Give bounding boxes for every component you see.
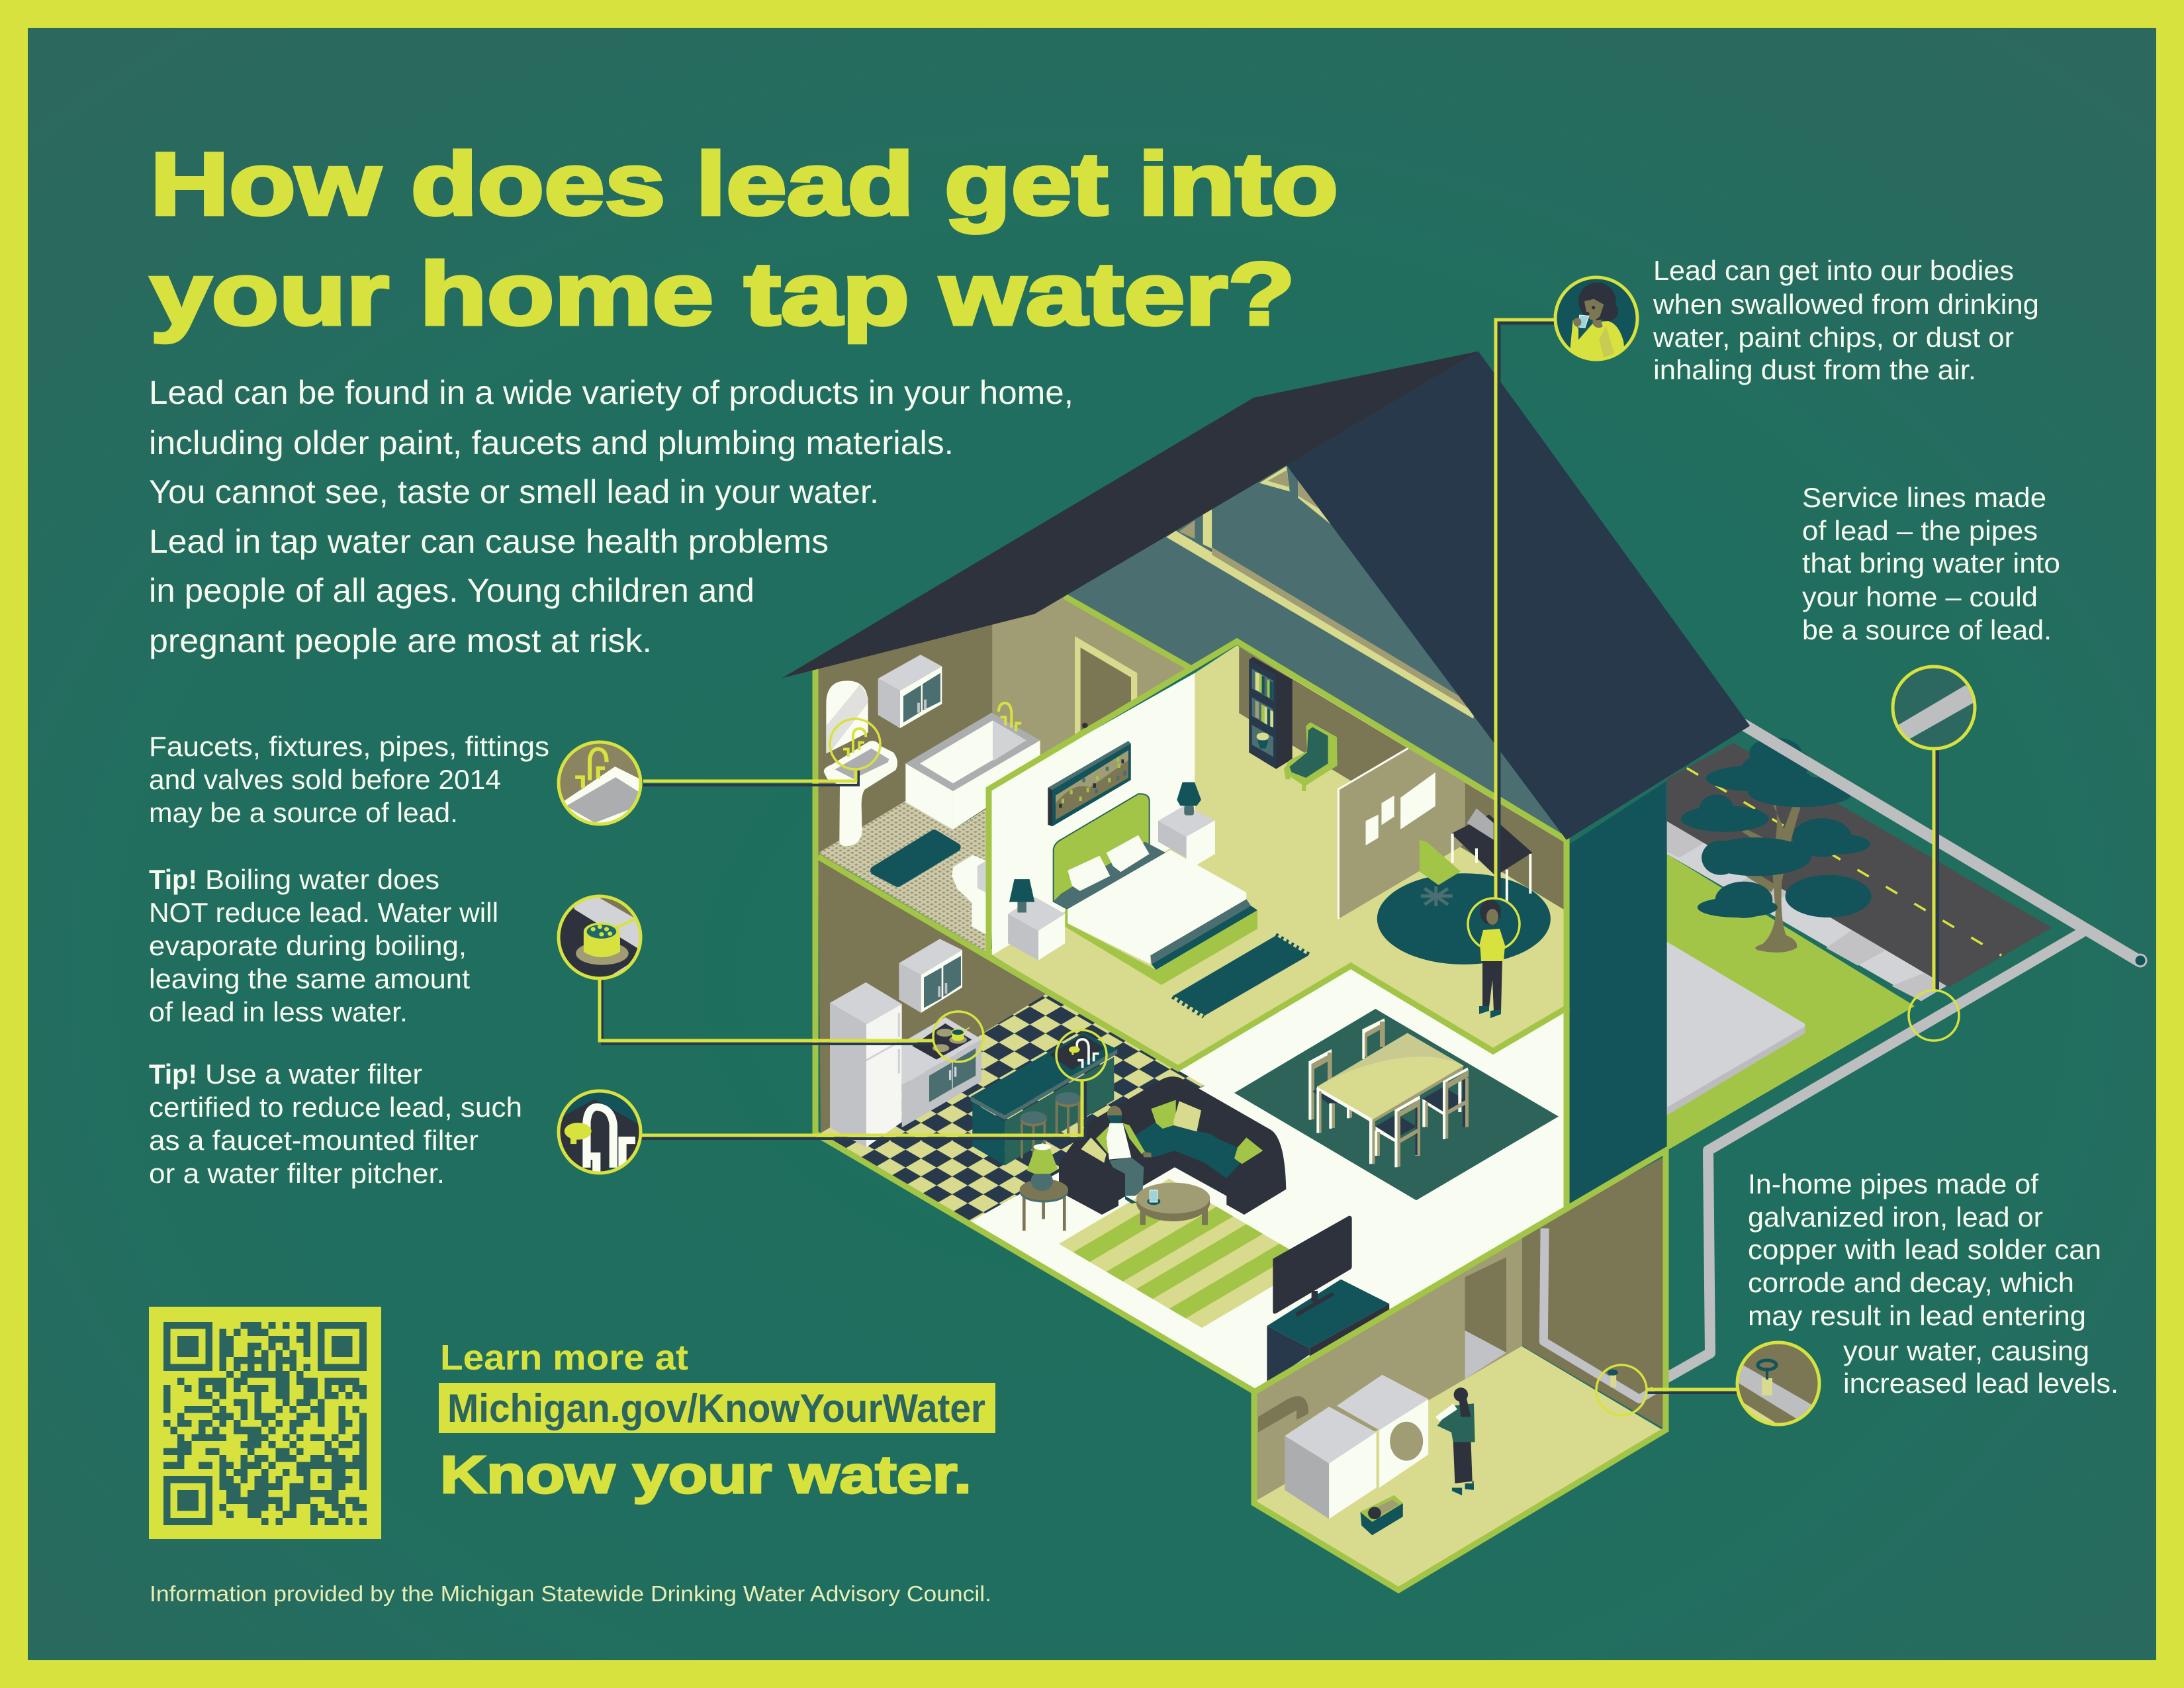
text: service lines: Service lines made [1802,482,2046,513]
tile floor [819,801,988,953]
callout rings [559,277,1975,1425]
text: service lines [1802,482,2060,645]
text: in-home pipes [1748,1168,2118,1399]
in-home pipe [1543,1229,1654,1399]
road [1667,743,2052,988]
bar stools [1021,1092,1081,1158]
roof left slope [782,352,1479,678]
text: tip boiling [149,864,498,1027]
basement doorway [1465,1257,1506,1379]
text: faucets: and valves sold before 2014 [149,764,501,795]
pillows [1081,1100,1263,1164]
text: service lines: your home – could [1802,581,2038,612]
nightstand right [1158,782,1215,871]
front chair right [1422,1068,1469,1139]
text: tip filter: Tip! [149,1058,197,1090]
mirror [826,680,868,753]
pipe end [2134,955,2146,966]
text: swallowed [1653,255,2039,385]
bathroom wall [815,624,992,880]
text: tip filter: or a water filter pitcher. [149,1158,445,1189]
bedroom back [989,647,1564,964]
bedroom back wall [1239,647,1564,910]
water main pipe [1666,725,2138,1378]
intro text: Lead can be found in a wide variety of products in your home, [149,374,1073,411]
bed headboard [1054,794,1150,909]
bed runner [1150,899,1251,964]
basement [1255,1157,1663,1587]
bedroom floor [989,645,1567,1068]
intro text [149,374,1073,659]
yard and street [1667,737,2052,1150]
nightstand left [1008,879,1065,961]
bathroom [819,655,1040,953]
text: service lines: of lead – the pipes [1802,515,2038,546]
text: swallowed: water, paint chips, or dust or [1653,322,2014,353]
sidewalk joints [1667,821,1946,1001]
kitchen counter [902,1017,981,1127]
text: service lines: that bring water into [1802,547,2060,579]
text: in-home pipes: galvanized iron, lead or [1748,1201,2043,1233]
text: service lines: be a source of lead. [1802,614,2052,645]
basement right wall [1522,1157,1663,1428]
toilet [952,855,988,935]
painting [1048,741,1131,826]
man sitting [1096,1106,1152,1203]
basement floor [1255,1346,1663,1587]
leader: swallowing [1496,320,1555,899]
circle icon: pot boiling [559,894,645,979]
kitchen checker floor [821,994,1205,1221]
circle icon: service line [1893,667,1979,749]
house chimney column [1570,781,1666,1209]
circle icon: filter faucet [555,1089,645,1174]
footer credit: Information provided by the Michigan Statewide Drinking Water Advisory Council. [150,1581,991,1606]
office chair [1420,840,1461,906]
title: How does lead get into [150,135,1338,234]
upper floor walls [815,465,1567,880]
attic walls [1065,465,1567,840]
driveway edge [1667,1027,1805,1115]
house outline [815,596,1666,1590]
url highlight: Michigan.gov/KnowYourWater [447,1386,985,1430]
bathtub [905,713,1040,829]
armchair [1284,722,1338,791]
round rug [1377,873,1551,964]
text: swallowed: Lead can get into our bodies [1653,255,2014,286]
sofa [1059,1076,1286,1215]
QR code [149,1307,381,1539]
sink faucet [843,729,866,757]
coffee table [1136,1183,1210,1225]
bookcase [1249,657,1293,769]
bed mattress [1068,850,1246,964]
washer [1285,1407,1377,1519]
lower floor [821,966,1569,1392]
text: in-home pipes: corrode and decay, which [1748,1267,2074,1298]
partition wall [1338,748,1465,919]
circle icon: sink faucet [560,744,639,822]
upper kitchen cabinet [899,939,962,1013]
sidewalk [1667,821,1946,1001]
intro text: pregnant people are most at risk. [149,622,652,659]
wall pictures [1366,773,1435,845]
text: tip boiling: Boiling water does [205,864,439,895]
kitchen [830,939,1117,1166]
text: tip filter: Use a water filter [205,1058,422,1090]
dining table [1316,1033,1464,1164]
laundry basket [1360,1495,1403,1535]
text: tip filter: certified to reduce lead, such [149,1092,522,1123]
text: swallowed: inhaling dust from the air. [1653,354,1976,385]
fridge [830,982,902,1147]
leader: filter [641,1081,1085,1139]
cushions [1134,1123,1240,1178]
text: in-home pipes: copper with lead solder can [1748,1234,2101,1265]
dining rug [1234,1009,1559,1200]
bedroom rug runner [1173,935,1310,1017]
pillows [1068,835,1150,891]
text: in-home pipes: may result in lead entering [1748,1300,2086,1331]
roof [782,352,1750,840]
text: tip boiling: of lead in less water. [149,996,408,1027]
woman with clipboard [1435,1387,1475,1495]
roof right slope [1287,352,1750,840]
text: tip boiling: evaporate during boiling, [149,930,467,961]
road centre line [1687,768,2001,955]
text: faucets: Faucets, fixtures, pipes, fittings [149,731,549,762]
intro text: including older paint, faucets and plumbing materials. [149,424,954,461]
title: your home tap water? [150,245,1295,344]
text: faucets [149,731,549,828]
kitchen island [971,1033,1117,1166]
back chair right [1362,1018,1385,1059]
attic windows [1166,466,1475,719]
text: faucets: may be a source of lead. [149,797,458,828]
tub faucet [999,703,1021,731]
leader: in-home pipe [1647,1389,1737,1393]
intro text: You cannot see, taste or smell lead in your water. [149,473,879,510]
text: swallowed: when swallowed from drinking [1653,289,2039,320]
bedroom furniture [1048,657,1338,985]
leader: boiling [600,978,933,1044]
bed base [1065,909,1257,985]
small locator rings [830,719,1959,1415]
tv stand [1267,1280,1389,1383]
bath rug [875,834,956,882]
title [150,135,1338,344]
driveway [1667,942,1805,1115]
island filter [1069,1047,1080,1055]
text: tip boiling: leaving the same amount [149,963,470,994]
leader: faucet [643,771,858,785]
dining set [1234,1009,1559,1200]
text: tip filter: as a faucet-mounted filter [149,1125,478,1156]
leader lines [600,320,1937,1393]
side lamp table [1020,1144,1068,1231]
tree [1681,737,1872,953]
living room rug [1059,1179,1312,1328]
text: tip filter [149,1058,522,1189]
lawn [1667,854,1915,1150]
headboard linen [1054,842,1166,909]
shutoff valve [1608,1370,1618,1387]
front chair left [1375,1096,1420,1167]
leader: service line [1934,749,1937,990]
bedroom front wall [989,673,1195,955]
sofa and coffee table [1059,1076,1286,1225]
text: in-home pipes: your water, causing [1843,1335,2089,1366]
text: tip boiling: Tip! [149,864,197,895]
sink [824,741,897,846]
wall pipe [1258,1396,1308,1432]
intro text: in people of all ages. Young children and [149,572,754,609]
back hall wall [992,595,1191,791]
kitchen wall [818,859,1048,1133]
learn more heading: Learn more at [440,1338,688,1378]
text: in-home pipes: In-home pipes made of [1748,1168,2038,1199]
back chair left [1308,1049,1352,1129]
dryer [1337,1375,1428,1488]
standing person [1479,900,1505,1018]
stove and pot [912,1023,972,1060]
hall door [1075,636,1137,735]
circle icon: in-home pipe [1734,1342,1827,1431]
text: in-home pipes: increased lead levels. [1843,1368,2118,1399]
desk [1451,808,1532,901]
text: tip boiling: NOT reduce lead. Water will [149,897,498,928]
circle icon: person drinking [1555,277,1637,366]
slogan: Know your water. [440,1445,972,1504]
basement left wall [1255,1233,1522,1501]
cabinet [878,655,942,728]
intro text: Lead in tap water can cause health problems [149,523,829,560]
tv [1273,1216,1352,1317]
island faucet [1077,1039,1099,1068]
